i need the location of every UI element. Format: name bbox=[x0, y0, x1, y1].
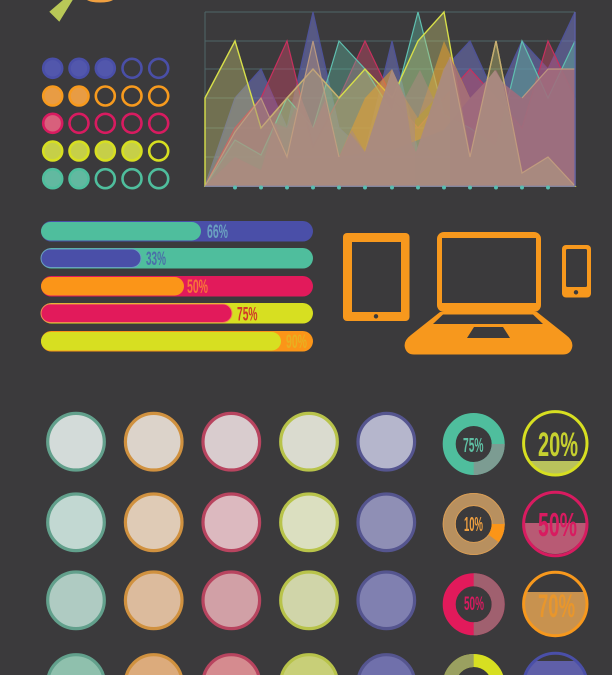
overlap tone: mauve bbox=[450, 57, 575, 186]
baseline bbox=[205, 185, 575, 187]
bar: 50%: 50% bbox=[187, 277, 208, 298]
donut: 50%: 50% bbox=[464, 594, 484, 615]
dot row: orange bbox=[43, 86, 168, 106]
dot row: yellow bbox=[43, 142, 168, 160]
dot row: blue bbox=[43, 59, 168, 78]
bar: 90%: 90% bbox=[286, 332, 307, 353]
donut: 75%: 75% bbox=[463, 435, 484, 457]
bar: 33%: 33% bbox=[146, 249, 166, 270]
area series: orange bbox=[339, 41, 470, 157]
gauge: 20% bbox=[524, 412, 587, 475]
area series: blue bbox=[205, 12, 575, 186]
progress bars bbox=[41, 221, 313, 353]
bar: 50% bbox=[41, 276, 313, 298]
dot rating matrix bbox=[43, 59, 168, 188]
donut: 50% bbox=[449, 580, 498, 629]
bar: 33% bbox=[41, 248, 313, 270]
swatch row 4 bbox=[48, 655, 415, 675]
overlap tone: soft peach bbox=[205, 41, 434, 186]
swatch circle grid bbox=[48, 413, 415, 675]
icon: laptop bbox=[405, 232, 572, 354]
area series: yellow bbox=[205, 12, 575, 186]
x-axis markers bbox=[233, 186, 550, 190]
icon: phone bbox=[562, 245, 591, 298]
bar: 75%: 75% bbox=[237, 304, 258, 326]
right edge bbox=[574, 12, 576, 186]
donut: 75% bbox=[449, 420, 498, 468]
dot row: red bbox=[43, 114, 168, 133]
donut: 10% bbox=[443, 494, 504, 554]
icon: tablet bbox=[343, 233, 410, 321]
bar: 66%: 66% bbox=[207, 222, 228, 243]
gauge: 70%: 70% bbox=[538, 588, 575, 624]
area series: teal bbox=[205, 12, 575, 186]
swatch row 1 bbox=[48, 413, 415, 470]
gauge: 50%: 50% bbox=[538, 506, 577, 543]
gauge: cropped bottom bbox=[524, 653, 587, 675]
icon: cropped top-left wedge bbox=[49, 0, 113, 22]
gauge: 70% bbox=[524, 572, 587, 636]
dot row: teal bbox=[43, 169, 168, 188]
overlap tone: solid peach bbox=[205, 57, 575, 186]
bar: 90% bbox=[41, 331, 313, 353]
bar: 66% bbox=[41, 221, 313, 243]
area series: red bbox=[205, 41, 575, 186]
swatch row 3 bbox=[48, 572, 415, 629]
peach series outlines bbox=[205, 41, 575, 186]
donut: cropped bottom bbox=[449, 660, 498, 675]
gauge: 20%: 20% bbox=[538, 426, 578, 464]
area chart bbox=[205, 12, 575, 190]
swatch row 2 bbox=[48, 494, 415, 551]
bar: 75% bbox=[41, 303, 313, 326]
donut: 10%: 10% bbox=[464, 514, 483, 536]
gauge: 50% bbox=[524, 492, 587, 556]
